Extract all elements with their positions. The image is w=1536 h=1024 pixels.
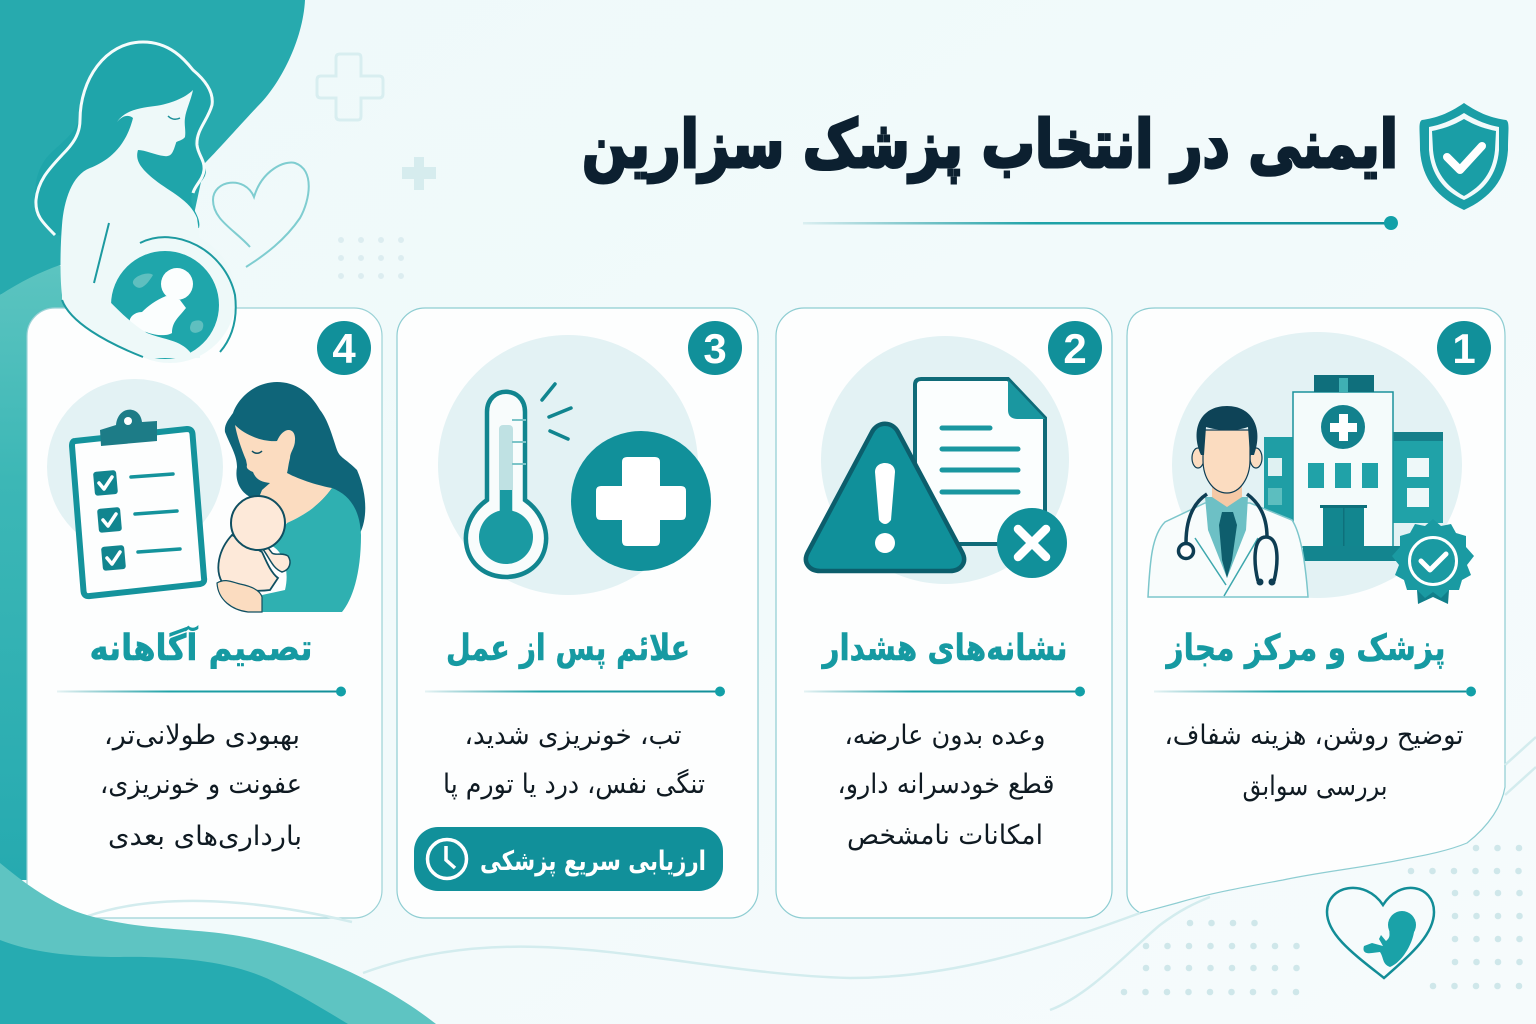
document	[915, 379, 1045, 544]
body text 3: تب، خونریزی شدید،	[464, 720, 682, 751]
divider 1	[1154, 686, 1476, 696]
decorative outline plus	[317, 54, 383, 120]
clipboard clip	[100, 410, 157, 446]
hair	[35, 42, 212, 240]
illustration: pregnant woman	[35, 42, 236, 363]
cross circle	[571, 431, 711, 571]
body text 4: بارداری‌های بعدی	[108, 821, 302, 852]
number badge 4	[317, 321, 371, 375]
body and face	[60, 90, 200, 358]
panel 2 illustration: warning and document	[806, 336, 1069, 584]
card 4	[27, 308, 382, 918]
arm	[62, 280, 192, 358]
mother hand	[217, 581, 262, 612]
doctor neck	[1212, 480, 1242, 507]
x circle	[997, 508, 1067, 578]
warning triangle	[806, 424, 964, 571]
doctor face	[1203, 430, 1250, 493]
baby head	[231, 496, 285, 550]
divider 4	[57, 686, 346, 696]
heading 4: تصمیم آگاهانه	[90, 625, 312, 669]
body text 2: وعده بدون عارضه،	[844, 720, 1046, 751]
icon: clock	[428, 840, 466, 878]
womb	[111, 251, 219, 359]
doctor shirt and tie	[1205, 497, 1248, 578]
badge	[1417, 590, 1449, 604]
icon: shield with check	[1420, 103, 1508, 210]
decorative filled plus	[402, 157, 436, 190]
thermometer	[466, 392, 546, 577]
decorative dots bottom	[1124, 848, 1520, 992]
body text 1: بررسی سوابق	[1242, 771, 1388, 802]
divider 3	[425, 686, 725, 696]
doctor ears	[1192, 448, 1204, 468]
rays	[542, 384, 571, 439]
mother closed eye	[252, 451, 262, 453]
heading 3: علائم پس از عمل	[446, 628, 690, 669]
card 2	[776, 308, 1112, 918]
panel 4 illustration: checklist and mother with baby	[47, 379, 365, 612]
belly ring	[104, 231, 236, 363]
doctor coat	[1148, 503, 1308, 597]
callout text: ارزیابی سریع پزشکی	[480, 846, 706, 877]
panel 1 illustration: doctor and hospital	[1148, 332, 1474, 604]
number badge 3	[688, 321, 742, 375]
body text 2	[838, 720, 1054, 851]
belly outline	[140, 237, 236, 352]
number badge 2	[1048, 321, 1102, 375]
decorative background: teal blob and left strip	[0, 0, 305, 880]
body text 4: عفونت و خونریزی،	[100, 769, 302, 800]
heading 1: پزشک و مرکز مجاز	[1165, 628, 1446, 669]
divider 2	[804, 686, 1085, 696]
title divider	[803, 216, 1398, 230]
body text 3	[443, 720, 705, 800]
body text 2: امکانات نامشخص	[847, 820, 1043, 851]
card 3	[397, 308, 758, 918]
number badge 1	[1437, 321, 1491, 375]
panel 3 illustration: thermometer and medical cross	[438, 335, 711, 595]
stethoscope	[1186, 494, 1267, 543]
mother shirt	[262, 488, 361, 612]
icon: heart with fetus	[1327, 888, 1434, 978]
arm outlines	[62, 223, 143, 357]
number badge 2: 2	[1063, 325, 1087, 372]
heading 2: نشانه‌های هشدار	[821, 628, 1068, 669]
doctor hair	[1197, 406, 1258, 455]
body text 4: بهبودی طولانی‌تر،	[104, 720, 300, 751]
decorative heart outline	[213, 162, 309, 267]
hair outline	[36, 42, 212, 235]
body text 1	[1164, 720, 1464, 802]
closed eye	[168, 116, 180, 119]
baby body	[218, 535, 278, 591]
number badge 1: 1	[1452, 325, 1476, 372]
decorative bottom waves	[88, 737, 1536, 1010]
body text 2: قطع خودسرانه دارو،	[838, 769, 1054, 800]
body text 1: توضیح روشن، هزینه شفاف،	[1164, 720, 1464, 751]
number badge 4: 4	[332, 325, 356, 372]
mother hair	[225, 382, 365, 533]
decorative dots near top	[341, 240, 405, 276]
decorative bottom-left waves	[0, 863, 436, 1024]
fetus	[130, 268, 203, 335]
baby arm	[262, 540, 290, 572]
body text 3: تنگی نفس، درد یا تورم پا	[443, 768, 705, 800]
clipboard	[72, 429, 204, 596]
number badge 3: 3	[703, 325, 727, 372]
callout pill: rapid medical evaluation	[414, 827, 723, 891]
body text 4	[100, 720, 302, 852]
card 1	[1127, 308, 1505, 913]
mother face and chest	[235, 425, 332, 523]
